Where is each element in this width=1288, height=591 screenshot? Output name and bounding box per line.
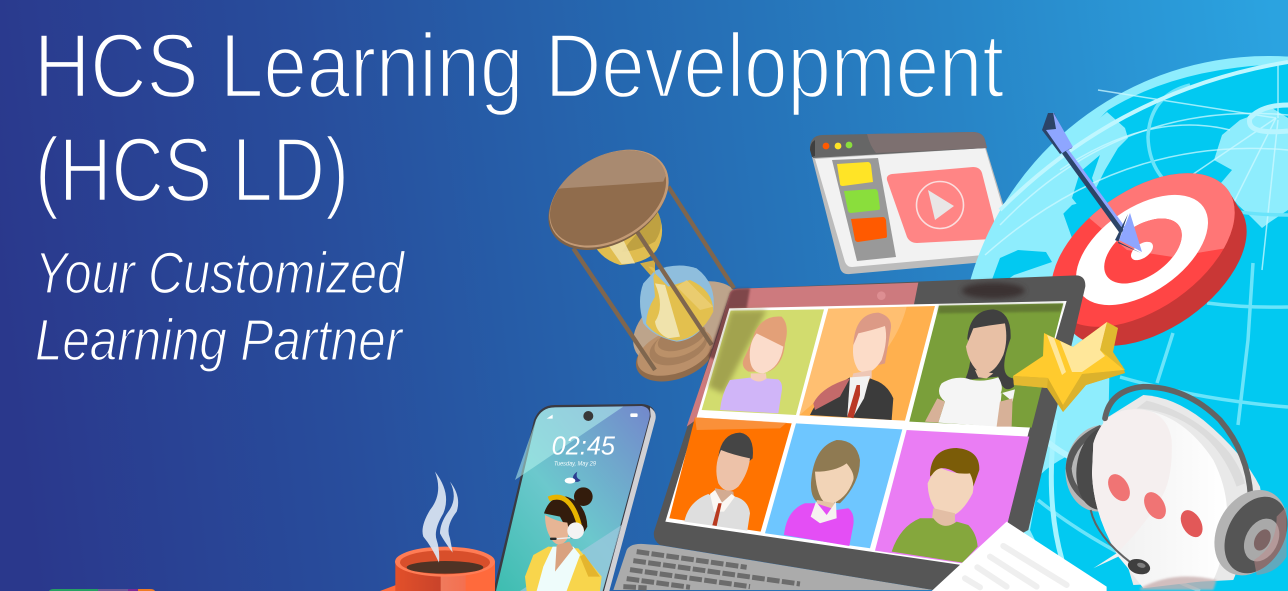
phone screen: [496, 406, 650, 591]
front rods: [573, 230, 712, 370]
smartphone: Tuesday, May 29: [554, 462, 597, 468]
video tile: woman blue background: [765, 423, 902, 548]
laptop: [613, 275, 1085, 590]
arrow: [1042, 112, 1142, 253]
video tile: woman dark green background: [909, 303, 1063, 428]
video player window: [810, 132, 1020, 274]
steam: [422, 472, 458, 563]
globe: [958, 56, 1288, 591]
globe ocean: [1030, 64, 1288, 591]
video tile: man orange background lower: [669, 417, 792, 532]
paper sheet: [932, 522, 1107, 591]
bubble front: [1092, 409, 1227, 588]
title: [34, 16, 1004, 221]
subtitle: Learning Partner: [35, 308, 404, 373]
phone clock: 02:45: [552, 430, 616, 460]
bezel reflection: [687, 283, 918, 427]
rear rod: [668, 187, 734, 288]
smartphone: [493, 404, 656, 591]
target: [1052, 173, 1247, 346]
laptop screen bezel: [654, 275, 1085, 590]
headband and mic: [1091, 387, 1251, 563]
subtitle: [35, 241, 405, 373]
chat dots: [1104, 470, 1207, 541]
title: HCS Learning Development: [34, 16, 1004, 117]
video tile: woman green background: [702, 309, 824, 415]
star: [1013, 322, 1125, 412]
left ear cup: [1060, 421, 1140, 516]
laptop keyboard: [613, 544, 933, 590]
subtitle: Your Customized: [35, 241, 405, 306]
continents: [990, 108, 1288, 285]
bottom colour strip: [49, 589, 155, 591]
weather icon: [565, 472, 581, 484]
coffee cup: [380, 472, 495, 591]
hourglass glass and sand: [595, 207, 714, 342]
hourglass: [548, 150, 736, 382]
screen panel: [665, 301, 1067, 565]
graticule: [985, 62, 1288, 270]
headset speech bubble: [1060, 387, 1288, 590]
video tile: man orange background: [799, 306, 935, 421]
hourglass top disc: [548, 150, 669, 250]
agent figure: [525, 487, 602, 591]
bubble back layer: [1100, 395, 1263, 585]
hourglass base: [619, 264, 755, 391]
title: (HCS LD): [35, 120, 349, 221]
video tile: man pink background: [875, 430, 1029, 563]
right ear cup: [1200, 477, 1288, 588]
